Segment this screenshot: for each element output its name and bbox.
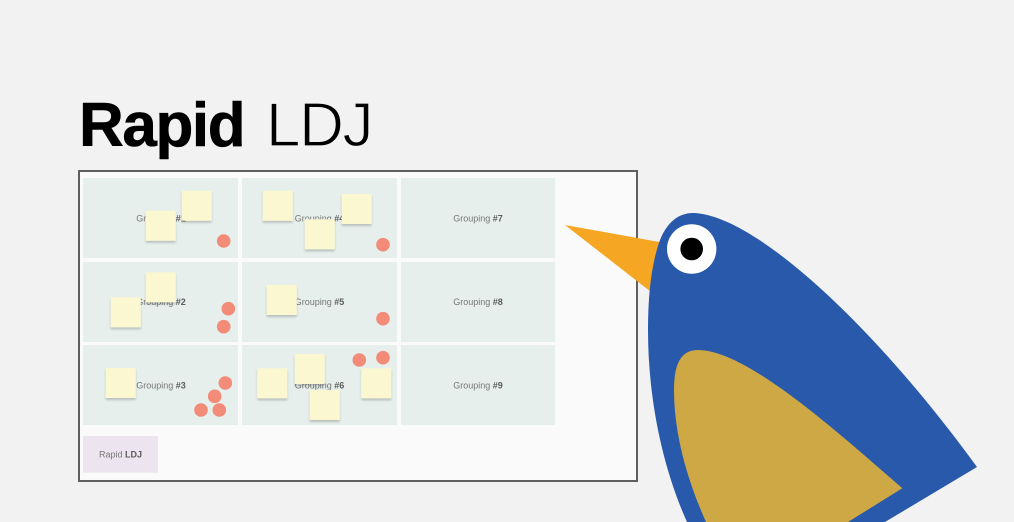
grouping cell 3: [83, 345, 238, 425]
board contents: [83, 178, 555, 473]
icon: bird: [565, 213, 977, 522]
panel: board frame: [79, 171, 637, 481]
grouping cell 9: Grouping #9: [453, 380, 503, 390]
title: Rapid: [79, 91, 244, 160]
grouping cell 1: [83, 178, 238, 258]
grouping cell 2: [83, 262, 238, 342]
grouping cell 9: [401, 345, 555, 425]
rapid ldj tag: Rapid LDJ: [99, 450, 142, 460]
grouping cell 5: Grouping #5: [295, 297, 344, 307]
grouping cell 6: [242, 345, 397, 425]
grouping cell 4: Grouping #4: [295, 214, 344, 224]
grouping cell 1: Grouping #1: [136, 214, 186, 224]
grouping cell 8: [401, 262, 555, 342]
bird beak: [565, 225, 662, 295]
grouping cell 8: Grouping #8: [453, 297, 503, 307]
grouping cell 4: [242, 178, 397, 258]
sticky notes: [106, 191, 391, 420]
grouping cell 7: [401, 178, 555, 258]
grouping cell 7: Grouping #7: [453, 214, 503, 224]
grouping cell 2: Grouping #2: [136, 297, 186, 307]
grouping cell 3: Grouping #3: [136, 380, 186, 390]
bird wing: [674, 350, 902, 522]
grouping cell 6: Grouping #6: [295, 380, 344, 390]
bird eye: [667, 224, 716, 274]
rapid ldj tag: [83, 436, 158, 473]
title: LDJ: [266, 91, 372, 160]
grouping cell 5: [242, 262, 397, 342]
title: [79, 91, 372, 160]
vote dots: [194, 234, 390, 417]
bird body: [648, 213, 977, 522]
